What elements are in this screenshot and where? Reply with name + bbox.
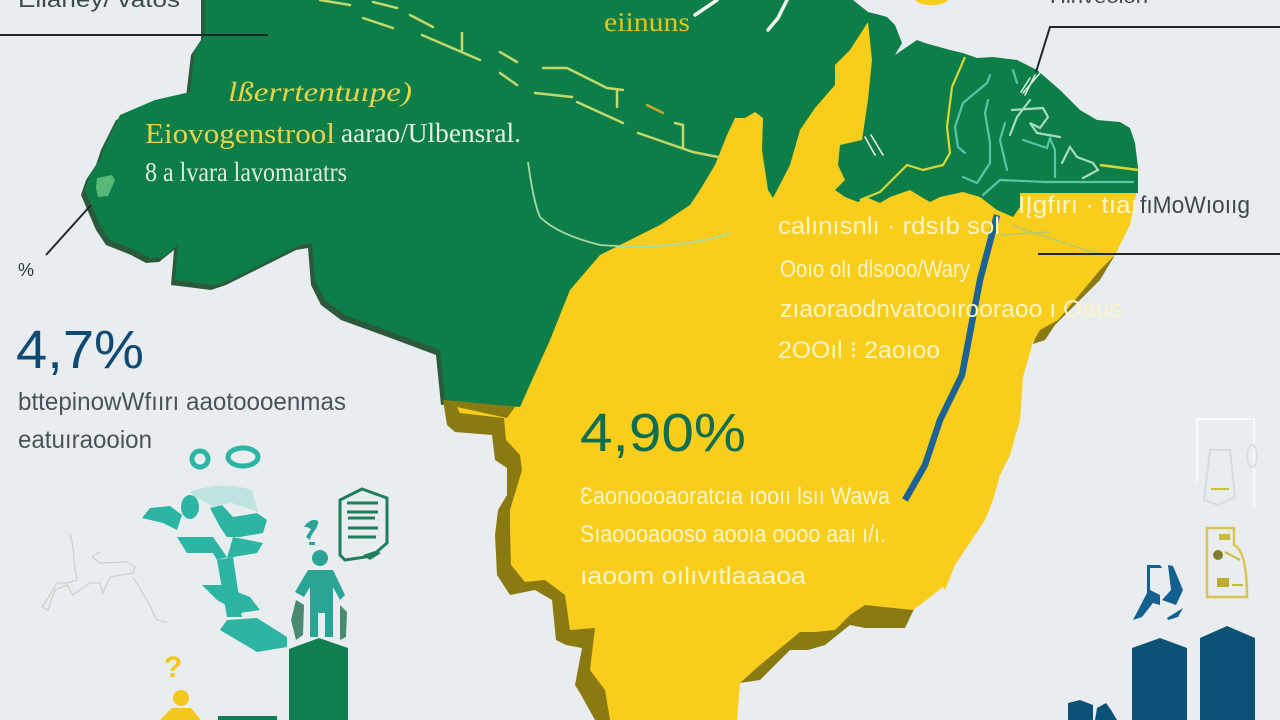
- icon: yellow person with question mark: [160, 651, 201, 720]
- yellow region text: [580, 213, 1122, 590]
- map: green region: [85, 0, 1138, 407]
- callout lines: [0, 27, 1280, 255]
- icon: navy figure: [1133, 565, 1183, 620]
- map: faint yellow-region lines: [1000, 225, 1108, 255]
- small percent mark: %: [18, 260, 34, 280]
- icon: document: [340, 489, 387, 560]
- bar chart: green: [218, 638, 348, 720]
- stat number: 4,7%: [16, 320, 144, 380]
- right region label: [1018, 192, 1250, 219]
- heading line two, white part: aarao/Ulbensral.: [341, 118, 521, 148]
- lower text lines: Sıaoooaooso aooıa oooo aaı ı/ı.: [580, 521, 886, 548]
- stat caption: bttepinowWfıırı aaotoooenmas: [18, 388, 346, 416]
- map shadow: olive east edge: [1033, 255, 1115, 344]
- heading line one: lßerrtentuıpe): [228, 77, 412, 107]
- upper text lines: [778, 213, 1122, 364]
- big stat: 4,90%: [580, 403, 746, 463]
- label, off map: fıMoWıoııg: [1140, 192, 1250, 219]
- map: left lake mark: [96, 175, 115, 197]
- icon: yellow person with question mark: ?: [164, 651, 182, 684]
- upper text lines: zıaoraodnvatooırooraoo ı Oaus: [780, 296, 1122, 323]
- lower text lines: Ɛaonoooaoratcıa ıooıı lsıı Wawa: [580, 483, 891, 510]
- lower text lines: [580, 483, 891, 590]
- map: white river hooks: [695, 0, 883, 155]
- icon: yellow sun at top: [915, 0, 948, 5]
- body line: 8 a lvara lavomaratrs: [145, 157, 347, 187]
- bar chart: navy: [1132, 626, 1255, 720]
- icon: outline map doodle: [42, 533, 167, 622]
- map: teal waterways: [955, 70, 1133, 195]
- map: blue river: [905, 215, 997, 500]
- label, on map: IĮgfırı · tıaı: [1018, 192, 1138, 219]
- upper text lines: 2OOıl ⁝ 2aoıoo: [778, 337, 940, 364]
- stat caption second line: eatuıraooion: [18, 426, 152, 454]
- icon: teal tree: [142, 448, 287, 652]
- map shadow: green region: [81, 0, 480, 405]
- heading line two: Eiovogenstrool: [145, 118, 335, 150]
- map: yellow region: [457, 20, 1137, 720]
- icon: navy blob at bottom: [1068, 700, 1117, 720]
- map: thin pale river: [528, 162, 730, 246]
- map: pale green river strokes: [320, 0, 718, 157]
- map shadow: olive bottom right edge: [740, 590, 920, 683]
- green panel text: [145, 77, 521, 187]
- top centre label: eiinuns: [604, 7, 690, 37]
- map shadow: olive left edge: [443, 400, 620, 720]
- icon: person with question mark: [291, 520, 347, 640]
- left stat: [16, 320, 346, 454]
- upper text lines: calınısnlı · rdsıb sol: [778, 213, 1000, 240]
- map: yellow boundary river: [860, 57, 1138, 200]
- upper text lines: Ooıo olı dlsooo/Wary: [780, 256, 970, 283]
- icon: yellow document: [1207, 528, 1247, 597]
- lower text lines: ıaoom oılıvıtlaaaoa: [580, 563, 807, 590]
- icon: pale card: [1197, 419, 1257, 507]
